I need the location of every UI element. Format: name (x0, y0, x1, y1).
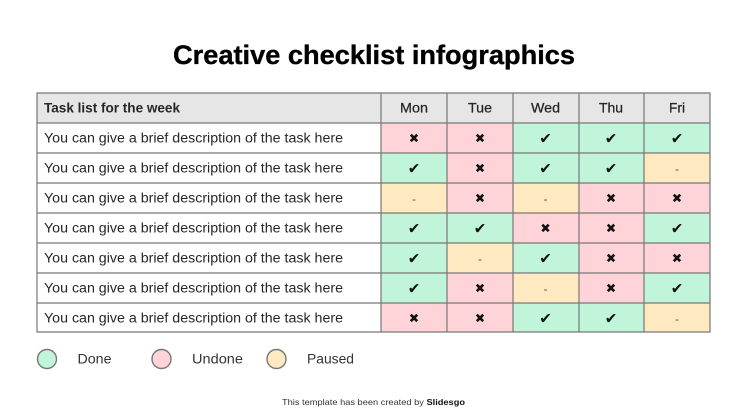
legend: paused (267, 350, 354, 368)
status marks: - (544, 282, 548, 296)
task descriptions: You can give a brief description of the task here (44, 250, 343, 266)
status marks (408, 130, 683, 328)
status marks: ✔ (605, 130, 617, 148)
legend: undone (152, 350, 243, 368)
checklist table (37, 93, 710, 332)
status marks: ✖ (540, 220, 551, 236)
status marks: - (675, 312, 679, 326)
header row (37, 93, 710, 123)
header row: Wed (531, 100, 560, 116)
status marks: ✖ (672, 250, 682, 266)
status marks: ✖ (475, 280, 485, 296)
header row: Tue (468, 100, 492, 116)
status marks: ✖ (606, 190, 616, 206)
status marks: ✔ (408, 280, 420, 298)
task descriptions: You can give a brief description of the task here (44, 190, 343, 206)
task descriptions: You can give a brief description of the task here (44, 280, 343, 296)
status marks: ✖ (475, 130, 485, 146)
legend: done (38, 350, 112, 368)
footer credit: This template has been created by Slidesgo (282, 397, 465, 407)
status marks: - (478, 252, 482, 266)
status marks: ✔ (474, 220, 486, 238)
task descriptions (44, 130, 343, 326)
status cells (381, 123, 710, 332)
status marks: ✖ (475, 310, 485, 326)
title: Creative checklist infographics (173, 40, 575, 70)
status marks: ✔ (671, 280, 683, 298)
status marks: ✔ (605, 310, 617, 328)
status marks: ✖ (475, 160, 485, 176)
legend: done: Done (78, 352, 112, 366)
header row: Thu (599, 100, 623, 116)
task descriptions: You can give a brief description of the task here (44, 220, 343, 236)
status marks: ✔ (539, 130, 552, 148)
header row: Mon (400, 100, 428, 116)
task descriptions: You can give a brief description of the task here (44, 160, 343, 176)
task descriptions: You can give a brief description of the task here (44, 130, 343, 146)
legend: paused: Paused (307, 352, 354, 366)
task descriptions: You can give a brief description of the task here (44, 310, 343, 326)
status marks: - (412, 192, 416, 206)
status marks: ✖ (409, 130, 419, 146)
status marks: ✔ (539, 250, 552, 268)
status marks: ✖ (672, 190, 682, 206)
status marks: ✖ (606, 220, 616, 236)
status marks: ✖ (475, 190, 485, 206)
status marks: - (544, 192, 548, 206)
status marks: ✔ (671, 130, 683, 148)
status marks: ✔ (408, 220, 420, 238)
status marks: ✔ (539, 160, 552, 178)
legend: undone: Undone (192, 352, 243, 366)
header row: Task list for the week (44, 100, 181, 116)
header row: Fri (669, 100, 685, 116)
status marks: ✔ (539, 310, 552, 328)
status marks: ✔ (408, 250, 420, 268)
status marks: ✔ (671, 220, 683, 238)
status marks: ✔ (605, 160, 617, 178)
status marks: ✖ (606, 250, 616, 266)
status marks: - (675, 162, 679, 176)
status marks: ✖ (409, 310, 419, 326)
status marks: ✖ (606, 280, 616, 296)
legend (38, 350, 354, 368)
status marks: ✔ (408, 160, 420, 178)
